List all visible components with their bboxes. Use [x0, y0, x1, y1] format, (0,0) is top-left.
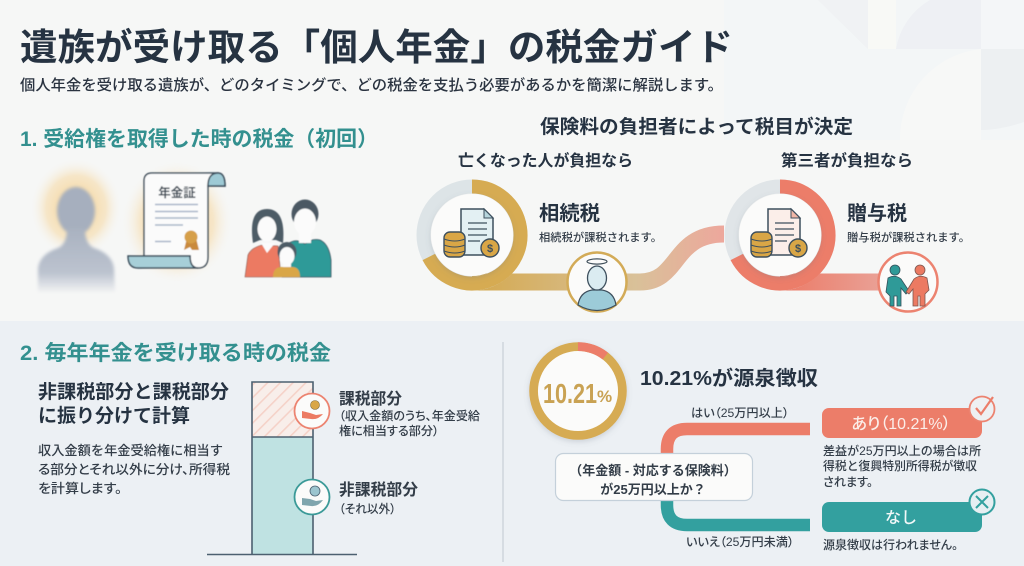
illustration: pension certificate [121, 160, 233, 284]
text: yes explanation: 差益が25万円以上の場合は所 [823, 443, 981, 458]
label: taxable part [339, 390, 480, 438]
icon: non-taxable hand [294, 480, 330, 514]
label: third party paid: 第三者が負担なら [781, 151, 913, 170]
title: 遺族が受け取る「個人年金」の税金ガイド [20, 27, 733, 68]
result box: no: なし [885, 509, 917, 527]
result box: yes [822, 408, 982, 438]
illustration: deceased silhouette with glow [30, 158, 122, 292]
heading: section 2: 2. 毎年年金を受け取る時の税金 [20, 342, 331, 365]
text: inheritance tax: 相続税が課税されます。 [539, 230, 662, 244]
text: no explanation: 源泉徴収は行われません。 [823, 537, 958, 552]
icon: check badge [970, 396, 994, 422]
body text: split calculation: る部分とそれ以外に分け、所得税 [38, 462, 230, 477]
text: inheritance tax: 相続税 [539, 202, 600, 225]
icon: cross badge [970, 490, 994, 514]
text: yes explanation: されます。 [823, 475, 873, 489]
label: yes: はい（25万円以上） [691, 406, 789, 420]
heading: withholding: 10.21%が源泉徴収 [640, 366, 818, 390]
stacked bar chart [207, 382, 357, 554]
connector band: gold to coral [472, 234, 724, 282]
certificate label: 年金証 [158, 185, 196, 200]
heading: section 1: 1. 受給権を取得した時の税金（初回） [20, 128, 378, 151]
icon: taxable hand coin [294, 394, 330, 428]
body text: split calculation: 収入金額を年金受給権に相当す [38, 443, 223, 458]
text: gift tax [847, 202, 970, 244]
heading: burden determines tax: 保険料の負担者によって税目が決定 [540, 115, 853, 138]
label: deceased paid: 亡くなった人が負担なら [458, 151, 633, 170]
connector band: coral [780, 274, 890, 290]
heading: split calculation [38, 381, 229, 427]
decision box: が25万円以上か？ [600, 482, 706, 497]
text: inheritance tax [539, 202, 662, 244]
top right background pattern [724, 0, 1024, 140]
icon: deceased with halo [568, 252, 626, 312]
ring: 10.21 percent [534, 347, 622, 435]
text: gift tax: 贈与税が課税されます。 [847, 230, 970, 244]
illustration: family [245, 200, 331, 277]
label: non-taxable part: （それ以外） [339, 501, 396, 516]
label: taxable part: （収入金額のうち、年金受給 [339, 408, 480, 423]
icon: document and coins: $ [795, 243, 801, 255]
heading: split calculation: 非課税部分と課税部分 [38, 381, 229, 403]
ring: 10.21 percent: % [597, 387, 612, 406]
text: gift tax: 贈与税 [847, 202, 907, 225]
ring: inheritance tax [424, 186, 521, 284]
label: taxable part: 権に相当する部分） [339, 423, 439, 438]
text: yes explanation: 得税と復興特別所得税が徴収 [823, 458, 977, 473]
label: taxable part: 課税部分 [339, 390, 402, 408]
top background [0, 0, 1024, 321]
subtitle: 個人年金を受け取る遺族が、どのタイミングで、どの税金を支払う必要があるかを簡潔に解説します。 [20, 76, 723, 94]
ring: gift tax [732, 186, 829, 284]
ring: 10.21 percent: 10.21 [543, 378, 597, 409]
heading: split calculation: に振り分けて計算 [38, 404, 190, 427]
arrow: no branch [667, 498, 810, 525]
bottom background [0, 321, 1024, 566]
decision box [556, 454, 752, 500]
arrow: yes branch [667, 429, 810, 456]
result box: yes: あり（10.21%） [851, 415, 951, 433]
label: non-taxable part [339, 481, 418, 516]
label: no: いいえ（25万円未満） [686, 534, 794, 549]
body text: split calculation [38, 443, 230, 496]
text: yes explanation [823, 443, 981, 489]
icon: document and coins: $ [487, 243, 493, 255]
icon: two people shaking hands [878, 252, 938, 312]
result box: no [822, 502, 982, 532]
decision box: （年金額 - 対応する保険料） [569, 463, 737, 478]
label: non-taxable part: 非課税部分 [339, 481, 418, 499]
body text: split calculation: を計算します。 [38, 481, 122, 496]
